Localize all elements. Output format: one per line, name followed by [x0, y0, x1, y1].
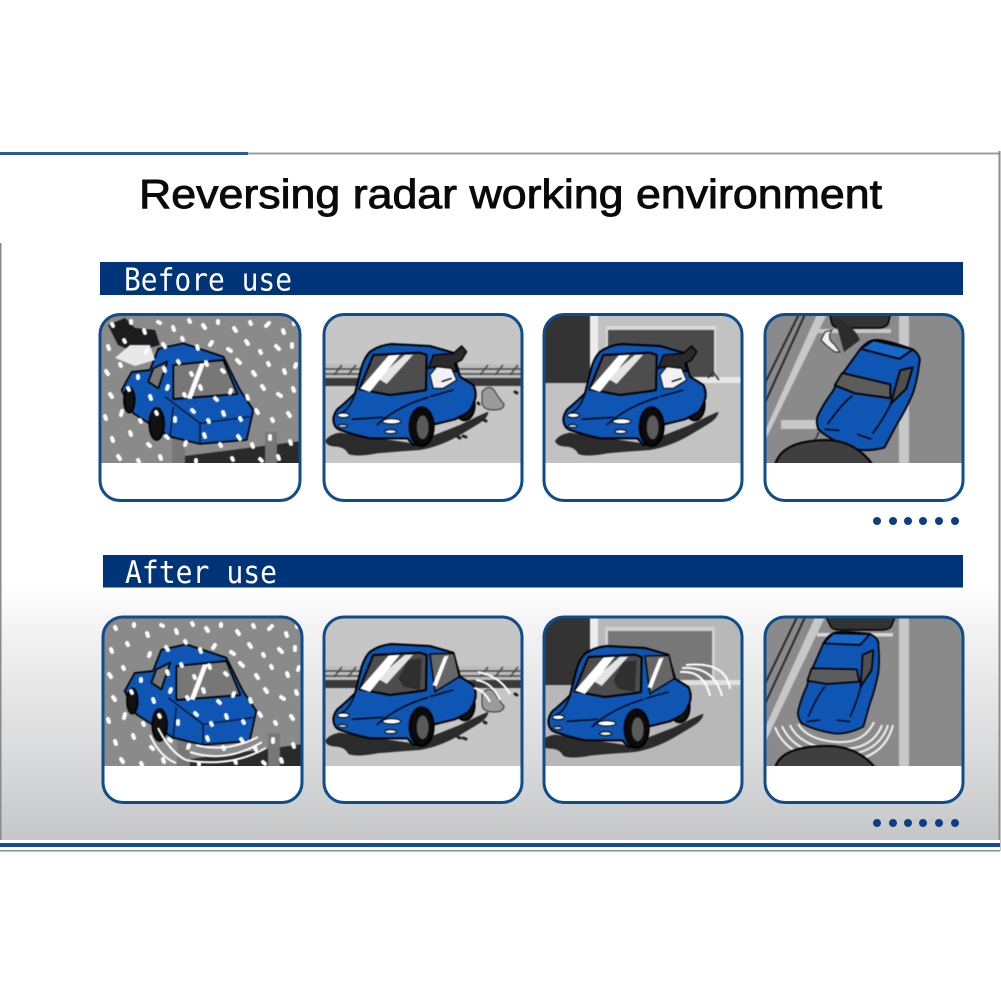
- panel: before use, pedestrian behind car: [322, 312, 524, 500]
- panel: after use, snow: [101, 615, 304, 802]
- title: Reversing radar working environment: [139, 171, 883, 217]
- section header: before use: Before use: [124, 262, 292, 298]
- pagination dots: after use: [873, 819, 959, 827]
- panel: before use, garage wall: [542, 312, 744, 500]
- panel: after use, pedestrian behind car with sensor waves: [322, 615, 524, 802]
- section header: after use: After use: [125, 555, 277, 591]
- panel: after use, parking bay with sensor waves: [763, 615, 965, 802]
- pagination dots: before use: [873, 517, 959, 525]
- frame lines: [0, 151, 1000, 852]
- section header: after use: [103, 555, 963, 591]
- panel: before use, parking bay: [763, 312, 965, 500]
- panel: after use, garage wall with sensor waves: [540, 615, 744, 802]
- section header: before use: [100, 262, 963, 298]
- background gradient panel: [0, 154, 1000, 851]
- panel: before use, snow: [98, 312, 302, 500]
